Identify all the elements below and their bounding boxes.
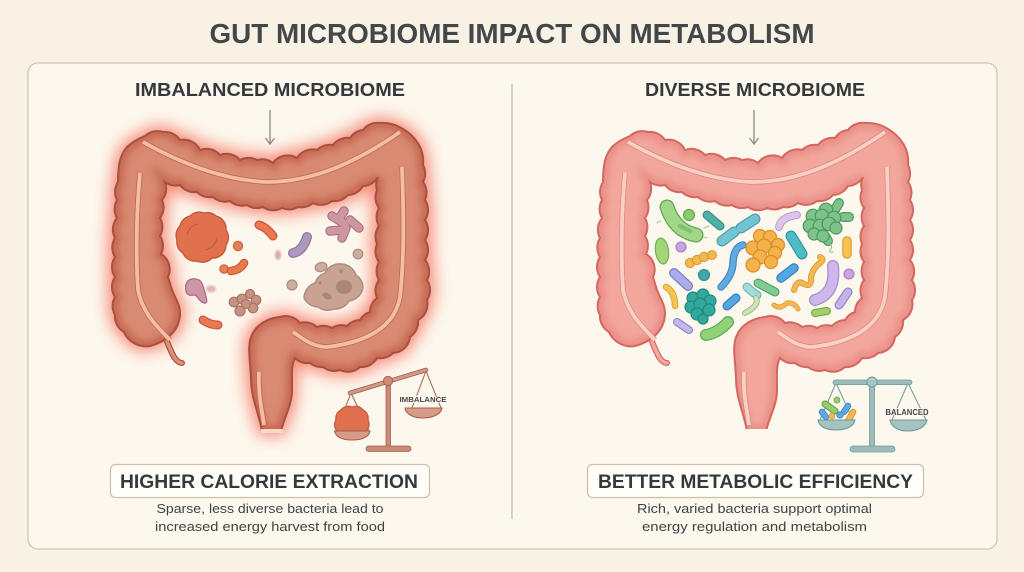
green bacillus xyxy=(667,207,696,235)
green cluster xyxy=(825,203,849,241)
arrow: diverse xyxy=(750,110,758,144)
illustration: healthy colon xyxy=(597,123,915,433)
icon: balanced scale xyxy=(818,377,929,452)
heading: diverse: DIVERSE MICROBIOME xyxy=(645,79,865,100)
pink rod cluster xyxy=(330,211,359,238)
bacteria: diverse xyxy=(654,203,854,335)
panel: diverse microbiome xyxy=(588,79,929,534)
description: imbalanced: Sparse, less diverse bacteria lead to xyxy=(156,501,384,516)
title: GUT MICROBIOME IMPACT ON METABOLISM xyxy=(210,18,814,49)
illustration: inflamed colon xyxy=(112,123,430,433)
description: diverse: Rich, varied bacteria support optimal xyxy=(637,501,872,516)
orange cluster xyxy=(746,230,784,272)
label box: better metabolic efficiency: BETTER METABOLIC EFFICIENCY xyxy=(598,471,913,493)
label box: better metabolic efficiency xyxy=(588,464,924,498)
pink blob xyxy=(186,279,207,303)
label box: higher calorie extraction: HIGHER CALORIE EXTRACTION xyxy=(120,471,418,493)
description: imbalanced xyxy=(155,501,385,534)
description: diverse: energy regulation and metabolism xyxy=(642,519,867,534)
heading: imbalanced: IMBALANCED MICROBIOME xyxy=(135,79,405,100)
icon: imbalance scale xyxy=(334,370,446,452)
label: balanced: BALANCED xyxy=(886,408,929,417)
label box: higher calorie extraction xyxy=(110,464,430,498)
grey-pink cluster xyxy=(229,290,261,316)
teal cluster xyxy=(685,289,716,324)
panel: imbalanced microbiome xyxy=(110,79,446,534)
bacteria: sparse xyxy=(176,211,363,325)
label: imbalance: IMBALANCE xyxy=(400,395,446,404)
description: imbalanced: increased energy harvest from food xyxy=(155,519,385,534)
description: diverse xyxy=(637,501,872,534)
brown clump xyxy=(304,264,363,310)
large orange clump xyxy=(176,212,228,262)
arrow: imbalanced xyxy=(266,110,274,144)
